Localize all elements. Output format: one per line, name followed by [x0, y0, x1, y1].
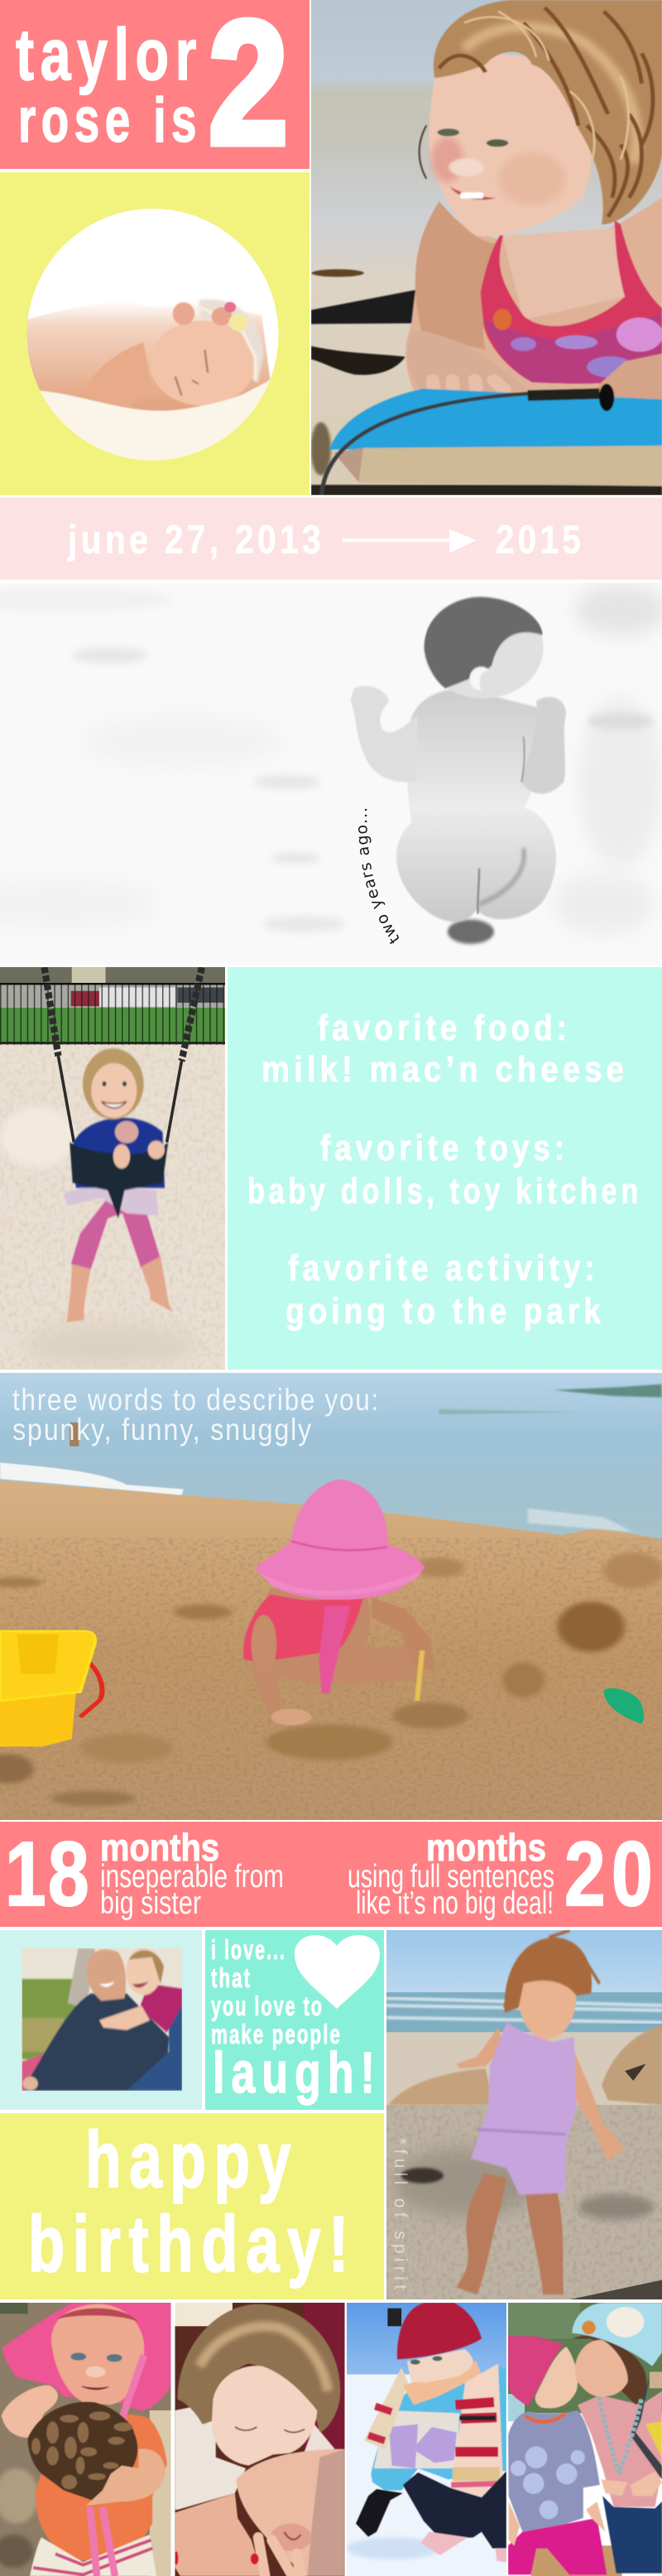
text: 20 months	[348, 1823, 659, 1925]
photo: two sisters nose to nose	[508, 2303, 662, 2576]
text: i love that you love to make people: make people	[211, 2019, 342, 2049]
icon: heart	[295, 1935, 380, 2009]
sub: curly hair	[420, 0, 662, 224]
text: two years ago: two years ago...	[358, 809, 399, 944]
sub: face	[51, 2304, 144, 2405]
text: i love that you love to make people: you love to	[211, 1991, 324, 2021]
photo: sisters kissing	[175, 2303, 344, 2576]
sub: arm and hands	[407, 330, 662, 405]
panel: favorites	[228, 967, 662, 1370]
sub: baby head	[237, 2449, 344, 2576]
text: birthday: birthday!	[28, 2200, 357, 2289]
sub: baby body	[350, 686, 566, 944]
photo: dad and toddler	[22, 1948, 182, 2091]
text: i love that you love to make people: i love...	[211, 1934, 286, 1965]
panel: title	[0, 0, 309, 181]
sub: face	[407, 2349, 473, 2383]
sub: sun hat	[2, 2303, 171, 2410]
sub: surfboard	[322, 383, 662, 495]
panel: date band	[0, 498, 662, 580]
sub: pink beanie	[508, 2336, 564, 2406]
text: 2015: 2015	[496, 518, 584, 562]
sub: pinecone	[27, 2402, 137, 2500]
sub: scarf	[364, 2367, 408, 2449]
sub: hair	[177, 2304, 340, 2433]
panel: dad photo	[0, 1930, 202, 2110]
photo: newborn in circle	[12, 207, 281, 468]
sub: floral dress	[175, 2402, 246, 2510]
text: i love that you love to make people	[211, 1934, 342, 2049]
sub: green shovel	[604, 1688, 644, 1724]
text: 18 months: big sister	[100, 1885, 201, 1921]
arrow	[343, 529, 477, 553]
sub: chains	[45, 967, 202, 1142]
text: favorite food: favorite food:	[318, 1008, 571, 1048]
panel: happy birthday	[0, 2113, 384, 2299]
text: 20 months: like it’s no big deal!	[356, 1885, 554, 1921]
sub: swimsuit	[481, 220, 662, 383]
text: happy: happy	[85, 2116, 299, 2204]
panel: i love card	[205, 1930, 384, 2110]
text: favorite food	[261, 1008, 628, 1090]
sub: skirt	[30, 2535, 156, 2576]
heading: rose is: rose is	[18, 85, 202, 156]
sub: left toddler pants	[508, 2518, 607, 2574]
text: june 27, 2013: june 27, 2013	[67, 518, 324, 562]
sub: big sister face	[212, 2366, 317, 2466]
text: 18 months: 18	[5, 1823, 91, 1925]
text: favorite toys: favorite toys:	[320, 1128, 568, 1168]
sub: left toddler dress	[508, 2410, 600, 2532]
text: favorite activity: going to the park	[285, 1291, 605, 1331]
sub: hat	[397, 2303, 482, 2359]
sub: right girl face	[575, 2340, 628, 2396]
sub: child	[64, 1048, 173, 1322]
text: 18 months	[5, 1823, 284, 1925]
photo: toddler walking on beach	[386, 1930, 662, 2299]
text: favorite toys	[247, 1128, 642, 1211]
text: 18 months: inseperable from	[100, 1859, 284, 1895]
sub: right girl shirt	[578, 2391, 662, 2507]
sub: shirt	[36, 2415, 167, 2560]
sub: left toddler face	[535, 2347, 578, 2408]
text: 20 months: months	[426, 1826, 546, 1869]
sub: jacket	[371, 2367, 506, 2491]
text: three words	[12, 1383, 380, 1447]
text: favorite activity: favorite activity:	[288, 1248, 599, 1288]
photo: toddler on swing	[0, 967, 225, 1370]
text: three words: three words to describe you:	[12, 1383, 380, 1417]
photo: black and white newborn	[0, 583, 662, 947]
text: laugh: laugh!	[213, 2040, 381, 2105]
sub: mother hand	[175, 2493, 262, 2576]
sub: child body	[243, 1588, 435, 1726]
sub: pants and mitten	[403, 2471, 506, 2549]
text: full of spirit: *full of spirit	[391, 2138, 410, 2292]
sub: owl hat	[572, 2303, 662, 2367]
sub: right girl hair	[572, 2336, 646, 2405]
text: i love that you love to make people: that	[211, 1962, 252, 1993]
photo: toddler in pink hat digging on beach	[0, 1373, 662, 1820]
sub: right girl jeans	[602, 2496, 662, 2574]
text: three words: spunky, funny, snuggly	[12, 1413, 313, 1447]
sub: face	[429, 55, 592, 236]
sub: child	[456, 1930, 625, 2294]
heading: taylor: taylor	[16, 13, 203, 95]
photo: baby with pinecone	[0, 2303, 171, 2576]
sub: arm	[2, 2386, 58, 2438]
text: 18 months: months	[100, 1826, 219, 1869]
panel: 18 and 20 months band	[0, 1822, 662, 1927]
photo: toddler in snow	[346, 2303, 506, 2576]
sub: yellow bucket	[0, 1631, 102, 1746]
panel: yellow newborn circle	[0, 172, 309, 495]
sub: strap	[90, 2355, 144, 2576]
text: favorite activity	[285, 1248, 605, 1331]
sub: hand	[86, 2448, 165, 2506]
sub: baby head	[424, 597, 544, 699]
text: 20 months: using full sentences	[348, 1859, 554, 1895]
photo: toddler on surfboard	[310, 0, 662, 495]
sub: pink sun hat	[256, 1480, 425, 1600]
